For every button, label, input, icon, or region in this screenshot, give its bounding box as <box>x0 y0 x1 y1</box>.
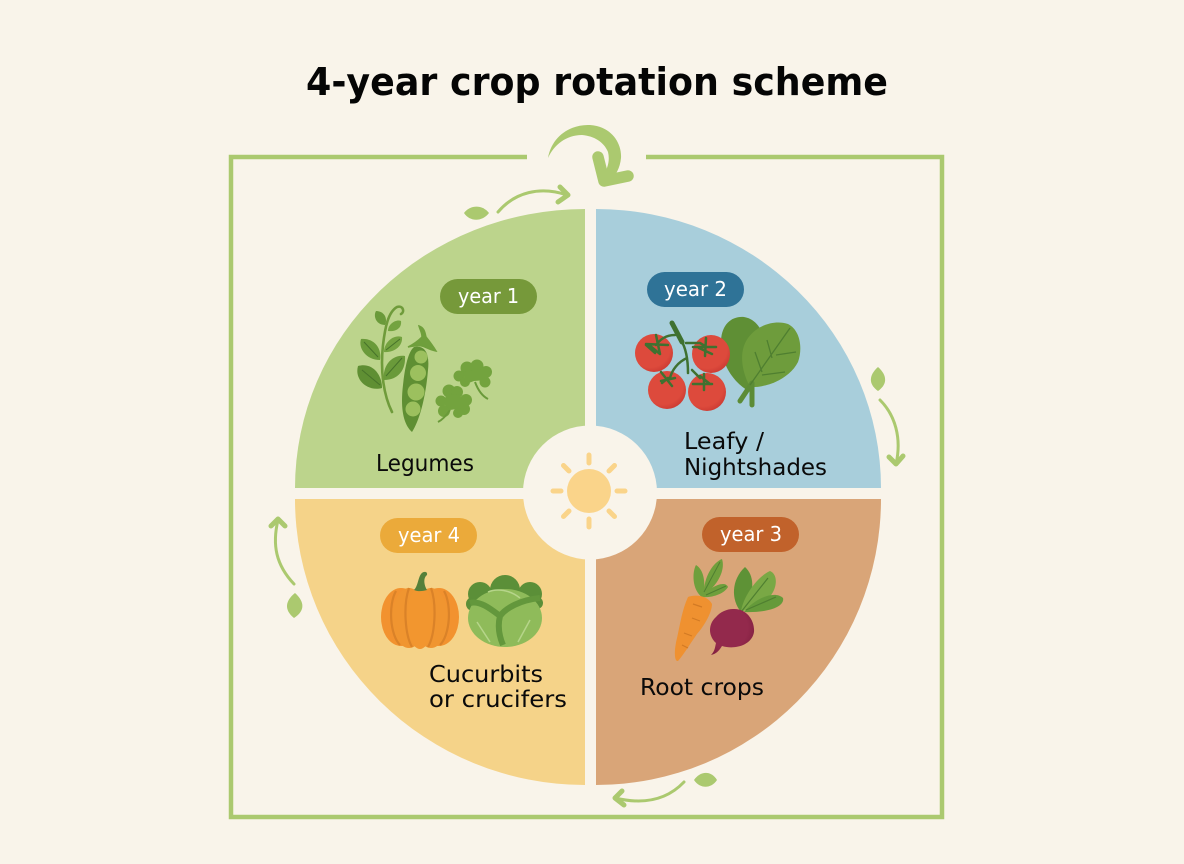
label: leafy / nightshades: Leafy / <box>684 427 764 455</box>
title: 4-year crop rotation scheme <box>306 60 888 104</box>
icon: leaf left <box>287 593 302 618</box>
arrow: year 2 to year 3 <box>880 400 903 464</box>
badge: year 4: year 4 <box>398 523 460 547</box>
panel: year 2 leafy nightshades <box>596 209 881 488</box>
icon: pumpkin <box>381 572 459 649</box>
badge: year 1 <box>440 279 537 314</box>
arrow: year 3 to year 4 <box>615 782 684 805</box>
label: legumes: Legumes <box>376 449 474 477</box>
panel: year 3 root crops <box>596 499 881 785</box>
badge: year 2: year 2 <box>664 277 727 301</box>
label: cucurbits or crucifers: Cucurbits <box>429 660 543 688</box>
icon: clover <box>436 360 492 422</box>
icon: carrot <box>675 559 728 661</box>
badge: year 4 <box>380 518 477 553</box>
label: leafy / nightshades: Nightshades <box>684 453 827 481</box>
arrow: year 4 to year 1 <box>271 519 294 584</box>
badge: year 3: year 3 <box>720 522 782 546</box>
label: cucurbits or crucifers <box>429 660 567 713</box>
panel: year 4 cucurbits or crucifers <box>295 499 585 785</box>
icon: tomatoes <box>635 323 730 411</box>
icon: leaf bottom <box>694 773 717 787</box>
arrow: year 1 to year 2 <box>498 187 568 212</box>
icon: spinach <box>721 317 800 405</box>
icon: leaf right <box>871 367 885 391</box>
badge: year 1: year 1 <box>458 284 519 308</box>
icon: leaf top <box>464 207 489 220</box>
icon: pea pod <box>402 326 436 432</box>
icon: beet <box>710 567 783 655</box>
frame <box>231 157 942 817</box>
panel: year 1 legumes <box>295 209 585 488</box>
icon: pea plant <box>357 307 405 412</box>
center circle with sun <box>523 426 657 560</box>
badge: year 2 <box>647 272 744 307</box>
icon: cabbage <box>466 575 543 647</box>
badge: year 3 <box>702 517 799 552</box>
arrow: main rotation <box>548 125 628 181</box>
label: root crops: Root crops <box>640 673 764 701</box>
label: leafy / nightshades <box>684 427 827 481</box>
icon: sun <box>553 455 625 527</box>
label: cucurbits or crucifers: or crucifers <box>429 685 567 713</box>
